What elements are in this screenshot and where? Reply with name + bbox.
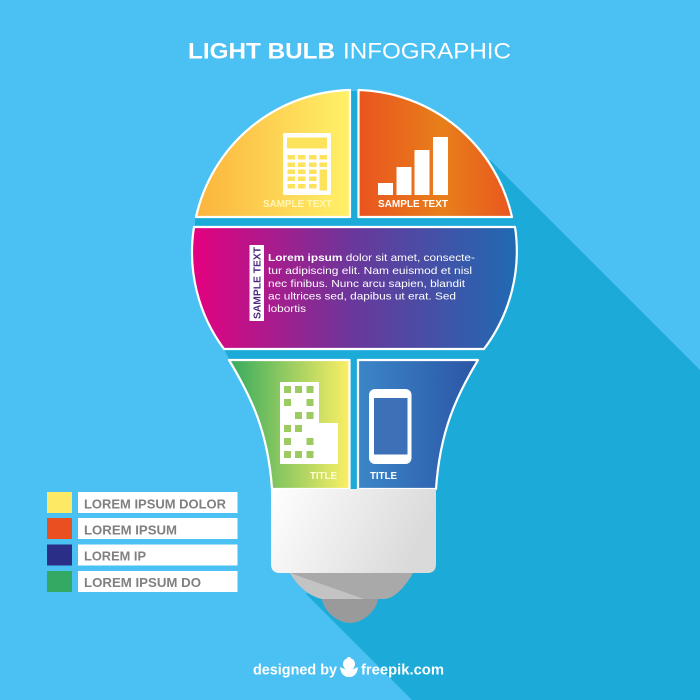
label: sample text orange: SAMPLE TEXT bbox=[378, 199, 448, 210]
bulb gaps between panels bbox=[195, 91, 513, 489]
legend item: navy bbox=[47, 544, 238, 566]
title: LIGHT BULB bbox=[188, 38, 335, 64]
title: INFOGRAPHIC bbox=[343, 38, 511, 64]
body text: Lorem ipsum dolor sit amet, consecte- bbox=[268, 252, 476, 264]
legend item: yellow bbox=[47, 492, 238, 513]
body text: tur adipiscing elit. Nam euismod et nisl bbox=[268, 265, 472, 277]
long shadow of the bulb bbox=[306, 160, 700, 700]
label: sample text yellow: SAMPLE TEXT bbox=[263, 199, 332, 210]
icon: freepik mascot bbox=[340, 657, 358, 677]
panel: magenta to blue text band bbox=[192, 227, 517, 349]
legend bbox=[47, 492, 238, 592]
icon: smartphone bbox=[369, 389, 412, 464]
legend item: orange: LOREM IPSUM bbox=[84, 524, 177, 538]
icon: bar chart bbox=[378, 137, 448, 195]
vertical label box: SAMPLE TEXT bbox=[252, 247, 264, 319]
panel: yellow calculator bbox=[196, 90, 350, 217]
footer credit: designed by bbox=[253, 662, 337, 678]
legend item: green: LOREM IPSUM DO bbox=[84, 576, 201, 590]
vertical label box bbox=[250, 245, 264, 321]
body text bbox=[268, 252, 476, 315]
footer credit: freepik.com bbox=[361, 662, 444, 678]
legend item: orange bbox=[47, 518, 238, 539]
label: title green: TITLE bbox=[310, 470, 337, 482]
icon: calculator bbox=[283, 133, 331, 195]
bulb cap bbox=[290, 573, 413, 599]
icon: building bbox=[280, 382, 338, 464]
label: title blue: TITLE bbox=[370, 470, 397, 482]
footer credit bbox=[253, 657, 444, 678]
legend item: navy: LOREM IP bbox=[84, 550, 146, 564]
legend item: green bbox=[47, 571, 238, 592]
panel: orange bar chart bbox=[358, 90, 512, 217]
legend item: yellow: LOREM IPSUM DOLOR bbox=[84, 498, 226, 512]
body text: ac ultrices sed, dapibus ut erat. Sed bbox=[268, 290, 456, 302]
panel: green building bbox=[229, 360, 350, 489]
panel: blue phone bbox=[358, 360, 478, 489]
body text: lobortis bbox=[268, 303, 306, 315]
body text: nec finibus. Nunc arcu sapien, blandit bbox=[268, 278, 465, 290]
bulb tip bbox=[322, 599, 378, 623]
light bulb bbox=[192, 90, 517, 623]
bulb base bbox=[271, 489, 436, 573]
